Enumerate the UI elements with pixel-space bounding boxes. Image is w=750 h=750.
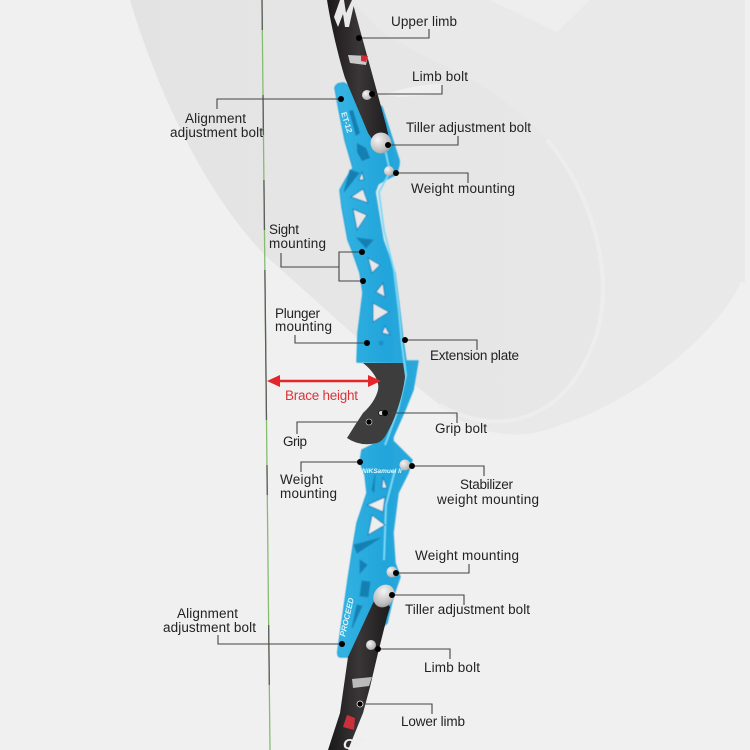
callout: tiller adjustment bolt lower: Tiller adjustment bolt [405,602,530,617]
callout: alignment adjustment bolt upper [170,96,344,140]
callout: weight mounting upper: Weight mounting [411,181,515,196]
weight bolt: lower [386,566,398,578]
riser lettering: top: ET-12 [339,111,354,135]
callout: plunger mounting: Plunger [275,306,320,321]
callout: grip bolt: Grip bolt [435,421,487,436]
lower limb [328,592,390,750]
callout: tiller adjustment bolt upper [385,120,531,148]
callout: alignment adjustment bolt upper: adjustment bolt [170,125,263,140]
riser [335,83,418,657]
brace height arrow: Brace height [285,388,358,403]
callout: tiller adjustment bolt upper: Tiller adjustment bolt [406,120,531,135]
callout: extension plate [402,337,519,363]
limb logo: upper [348,55,368,65]
upper limb [327,0,391,148]
callout: grip [283,419,372,449]
callout: sight mounting: Sight [269,222,299,237]
riser lettering: bottom: PROCEED [338,597,356,637]
riser window slot [349,110,360,136]
riser highlight [379,135,406,560]
callout: weight mounting upper [393,170,515,196]
limb bolt: upper [362,90,372,100]
callout: upper limb [356,14,457,41]
callout: stabilizer weight mounting: Stabilizer [460,477,514,492]
plunger hole [378,340,384,346]
callout: tiller adjustment bolt lower [389,592,530,617]
brace height arrow [267,375,381,403]
callout: weight mounting lower: Weight mounting [415,548,519,563]
weight bolt: upper [384,166,394,176]
callout: extension plate: Extension plate [430,348,519,363]
limb logo: lower [352,677,372,688]
callout: limb bolt upper: Limb bolt [412,69,468,84]
riser windows: lower [352,475,387,628]
callout: weight mounting middle [280,459,363,501]
limb lettering: upper [334,0,355,27]
callout: weight mounting lower [393,548,519,576]
callout: grip: Grip [283,434,307,449]
riser windows: upper [344,170,390,335]
callout: upper limb: Upper limb [391,14,457,29]
callout: limb bolt lower: Limb bolt [424,660,480,675]
tiller bolt: upper [370,132,392,154]
grip [347,363,405,444]
callout: sight mounting [269,222,366,284]
grip and bolts [347,90,410,650]
callout: weight mounting middle: mounting [280,486,337,501]
riser window pocket [357,143,370,161]
callout: plunger mounting: mounting [275,319,332,334]
bow string [262,0,270,750]
callout: stabilizer weight mounting [409,463,539,507]
callout: limb bolt lower [375,646,480,675]
callout: lower limb: Lower limb [401,714,465,729]
tiller bolt: lower [369,580,399,612]
grip bolt [378,410,384,416]
callout: limb bolt upper [369,69,468,97]
callout: alignment adjustment bolt lower: adjustment bolt [163,620,256,635]
limb bolt: lower [366,640,376,650]
callout: weight mounting middle: Weight [280,472,323,487]
limb mark: lower [343,715,355,730]
stabilizer bolt [400,460,410,470]
callout: grip bolt [382,410,487,436]
callout: sight mounting: mounting [269,236,326,251]
riser lettering [338,111,402,637]
callout: stabilizer weight mounting: weight mounting [436,492,539,507]
limb logo accent: upper [361,55,368,62]
callout: alignment adjustment bolt lower [163,606,345,647]
riser lettering: brand: NIKSamuel II [362,468,402,475]
callout: alignment adjustment bolt lower: Alignment [177,606,238,621]
callout: alignment adjustment bolt upper: Alignment [185,111,246,126]
callout: plunger mounting [275,306,370,346]
callout: lower limb [357,701,465,729]
